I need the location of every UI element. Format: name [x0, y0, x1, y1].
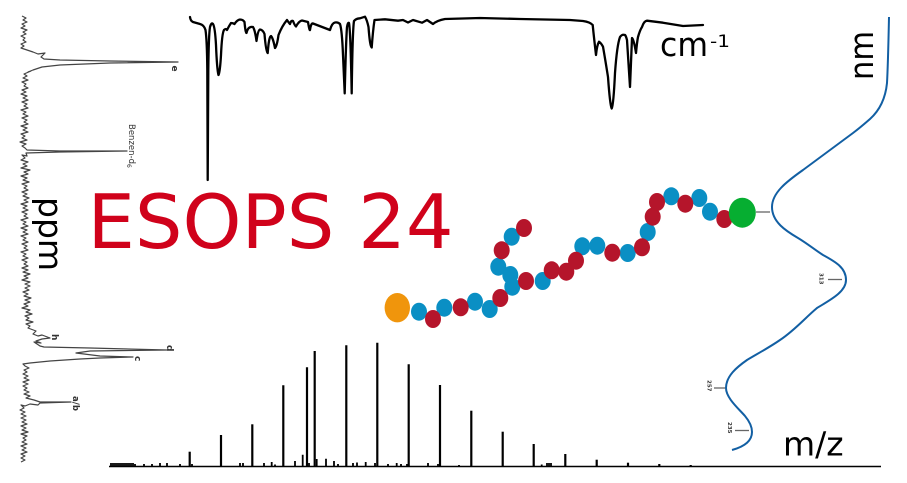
- NMR peak label Benzen-d6: 6: [125, 164, 132, 168]
- axis label cm-1: -1: [710, 32, 730, 52]
- UV curve: [726, 17, 889, 450]
- polymer chain: [385, 187, 756, 328]
- NMR peak label c: c: [132, 356, 142, 361]
- NMR peak label h: h: [49, 334, 59, 340]
- title: ESOPS 24: [88, 178, 454, 266]
- NMR peak label d: d: [164, 345, 174, 351]
- end group green: [729, 198, 756, 228]
- repeating blue and red monomers: [411, 187, 732, 328]
- IR spectrum: [190, 17, 703, 180]
- UV peak label 235: 235: [726, 422, 732, 434]
- main peak series: [190, 343, 691, 466]
- NMR peak label a/b: a/b: [70, 396, 80, 411]
- UV-Vis spectrum: [706, 17, 889, 450]
- axis label nm: nm: [842, 31, 881, 80]
- NMR peak label e: e: [169, 66, 179, 72]
- axis label cm-1: cm: [660, 25, 708, 64]
- axis label m/z: m/z: [783, 424, 844, 464]
- end group orange: [385, 293, 410, 322]
- NMR peak label Benzen-d6: Benzen-d: [126, 124, 136, 164]
- NMR spectrum: [20, 16, 179, 462]
- axis label ppm: ppm: [31, 197, 70, 271]
- minor peaks: [111, 455, 551, 466]
- UV peak label 313: 313: [818, 273, 824, 285]
- UV peak ticks: [714, 212, 842, 430]
- baseline: [109, 466, 881, 468]
- UV peak label 257: 257: [706, 380, 712, 392]
- mass spectrum: [109, 343, 881, 466]
